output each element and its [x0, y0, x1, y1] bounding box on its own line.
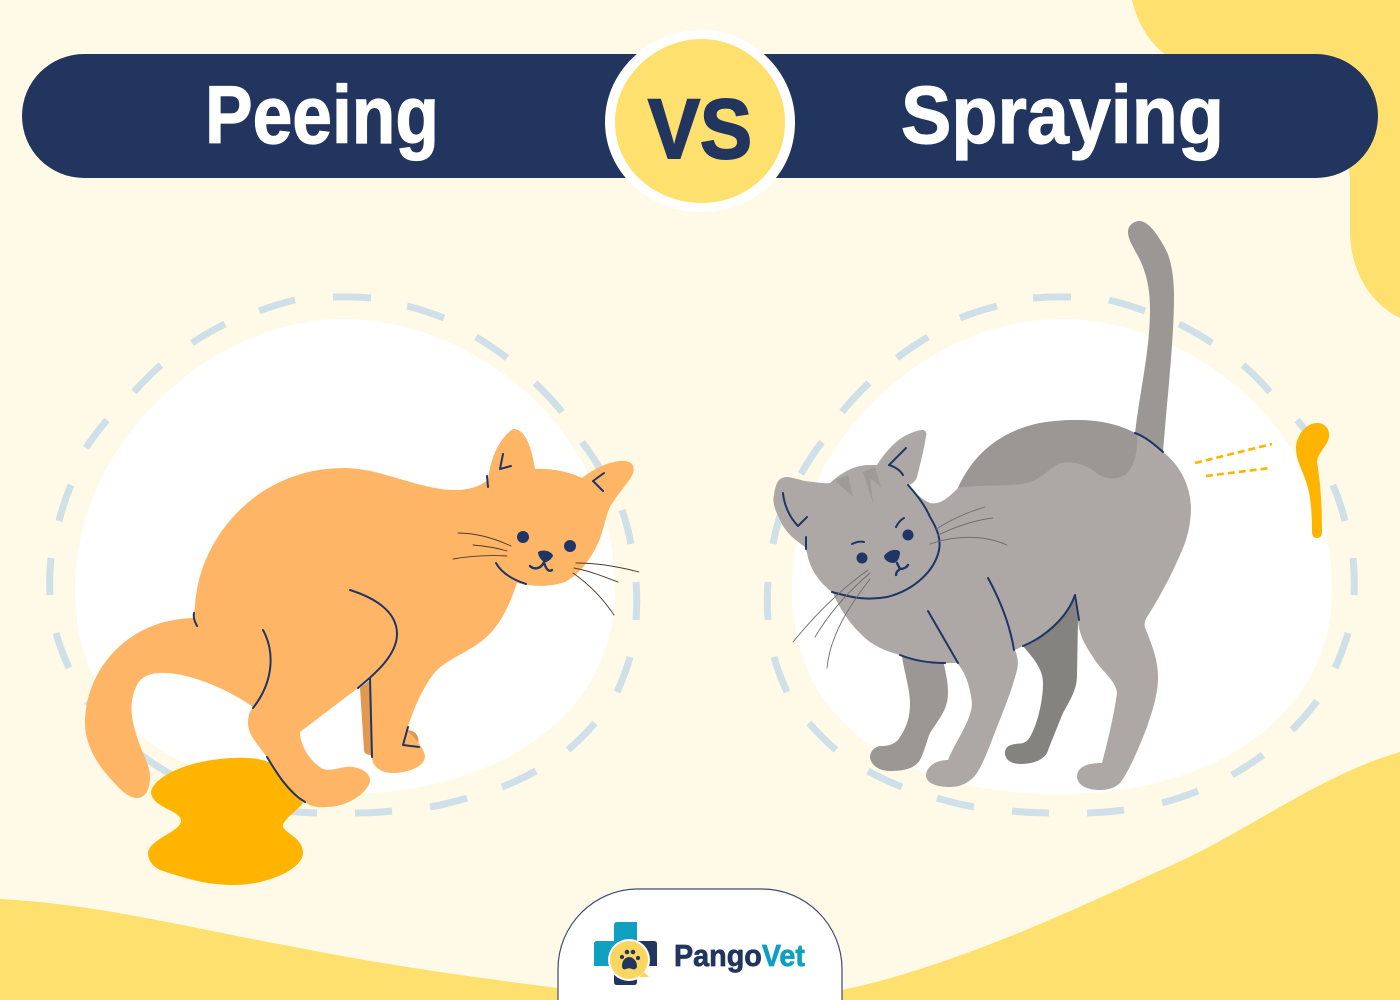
- cat line work: [783, 433, 1163, 663]
- puddle: [148, 758, 303, 885]
- heading: Spraying: Spraying: [901, 70, 1224, 161]
- heading: Peeing: Peeing: [205, 70, 439, 161]
- header bar: [22, 54, 1378, 178]
- cat body: [85, 429, 634, 807]
- hidden legs: [360, 680, 419, 755]
- background wave: bottom right: [842, 752, 1400, 1000]
- far hind leg: [1005, 595, 1078, 764]
- cat whiskers: [453, 533, 639, 615]
- dark back patch: [958, 420, 1137, 488]
- spray dashes: [1195, 444, 1272, 476]
- tail: [1128, 221, 1174, 452]
- panel: peeing illustration: [50, 297, 639, 885]
- logo wordmark: PangoVet: [674, 938, 805, 973]
- cat whiskers: [793, 507, 1007, 668]
- background blob: top right: [1132, 0, 1400, 318]
- panel: spraying illustration: [767, 221, 1354, 813]
- vs badge: [605, 30, 795, 212]
- cat eyes: [517, 531, 529, 543]
- cat body: [773, 420, 1191, 790]
- white blob backdrop: [75, 319, 615, 794]
- cat nose and mouth: [538, 551, 553, 562]
- spray drop: [1296, 423, 1329, 538]
- dashed ring: [767, 297, 1354, 813]
- dashed ring: [50, 297, 637, 813]
- speech bubble: [608, 939, 650, 981]
- cat line work: [194, 454, 604, 802]
- logo icon: [594, 922, 657, 985]
- background wave: bottom left: [0, 899, 558, 1000]
- head stripes: [835, 467, 881, 503]
- medical cross: [594, 922, 637, 966]
- logo card: [558, 889, 842, 1000]
- orange cat: [85, 429, 639, 807]
- cat nose and mouth: [884, 550, 900, 563]
- paw print: [622, 957, 637, 969]
- cat eyes: [902, 530, 914, 540]
- white blob backdrop: [792, 319, 1332, 794]
- grey cat: [773, 221, 1191, 790]
- vs text: VS: [648, 82, 752, 176]
- far front leg: [870, 657, 948, 771]
